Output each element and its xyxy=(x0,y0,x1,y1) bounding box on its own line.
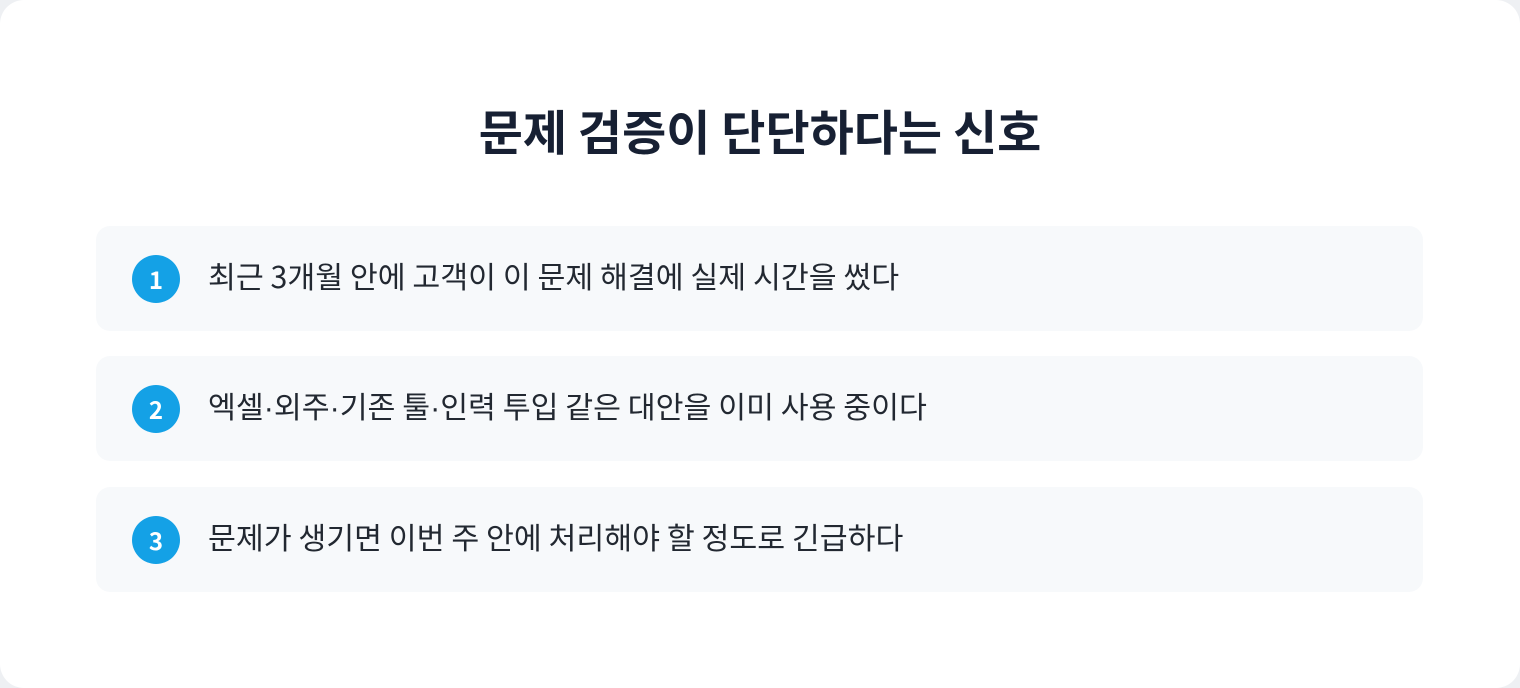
text: signal 2: 엑셀·외주·기존 툴·인력 투입 같은 대안을 이미 사용 중이다 xyxy=(208,383,927,427)
icon: number 1: 1 xyxy=(149,261,163,296)
icon: number 3: 3 xyxy=(149,522,163,557)
panel: signal 2 xyxy=(96,356,1423,461)
text: signal 1: 최근 3개월 안에 고객이 이 문제 해결에 실제 시간을 썼다 xyxy=(208,253,899,297)
panel: signal 3 xyxy=(96,487,1423,592)
icon: number 1 xyxy=(132,255,180,303)
title: 문제 검증이 단단하다는 신호 xyxy=(479,94,1041,164)
icon: number 2: 2 xyxy=(149,391,163,426)
text: signal 3: 문제가 생기면 이번 주 안에 처리해야 할 정도로 긴급하다 xyxy=(208,514,903,558)
panel: signal 1 xyxy=(96,226,1423,331)
icon: number 3 xyxy=(132,516,180,564)
icon: number 2 xyxy=(132,385,180,433)
